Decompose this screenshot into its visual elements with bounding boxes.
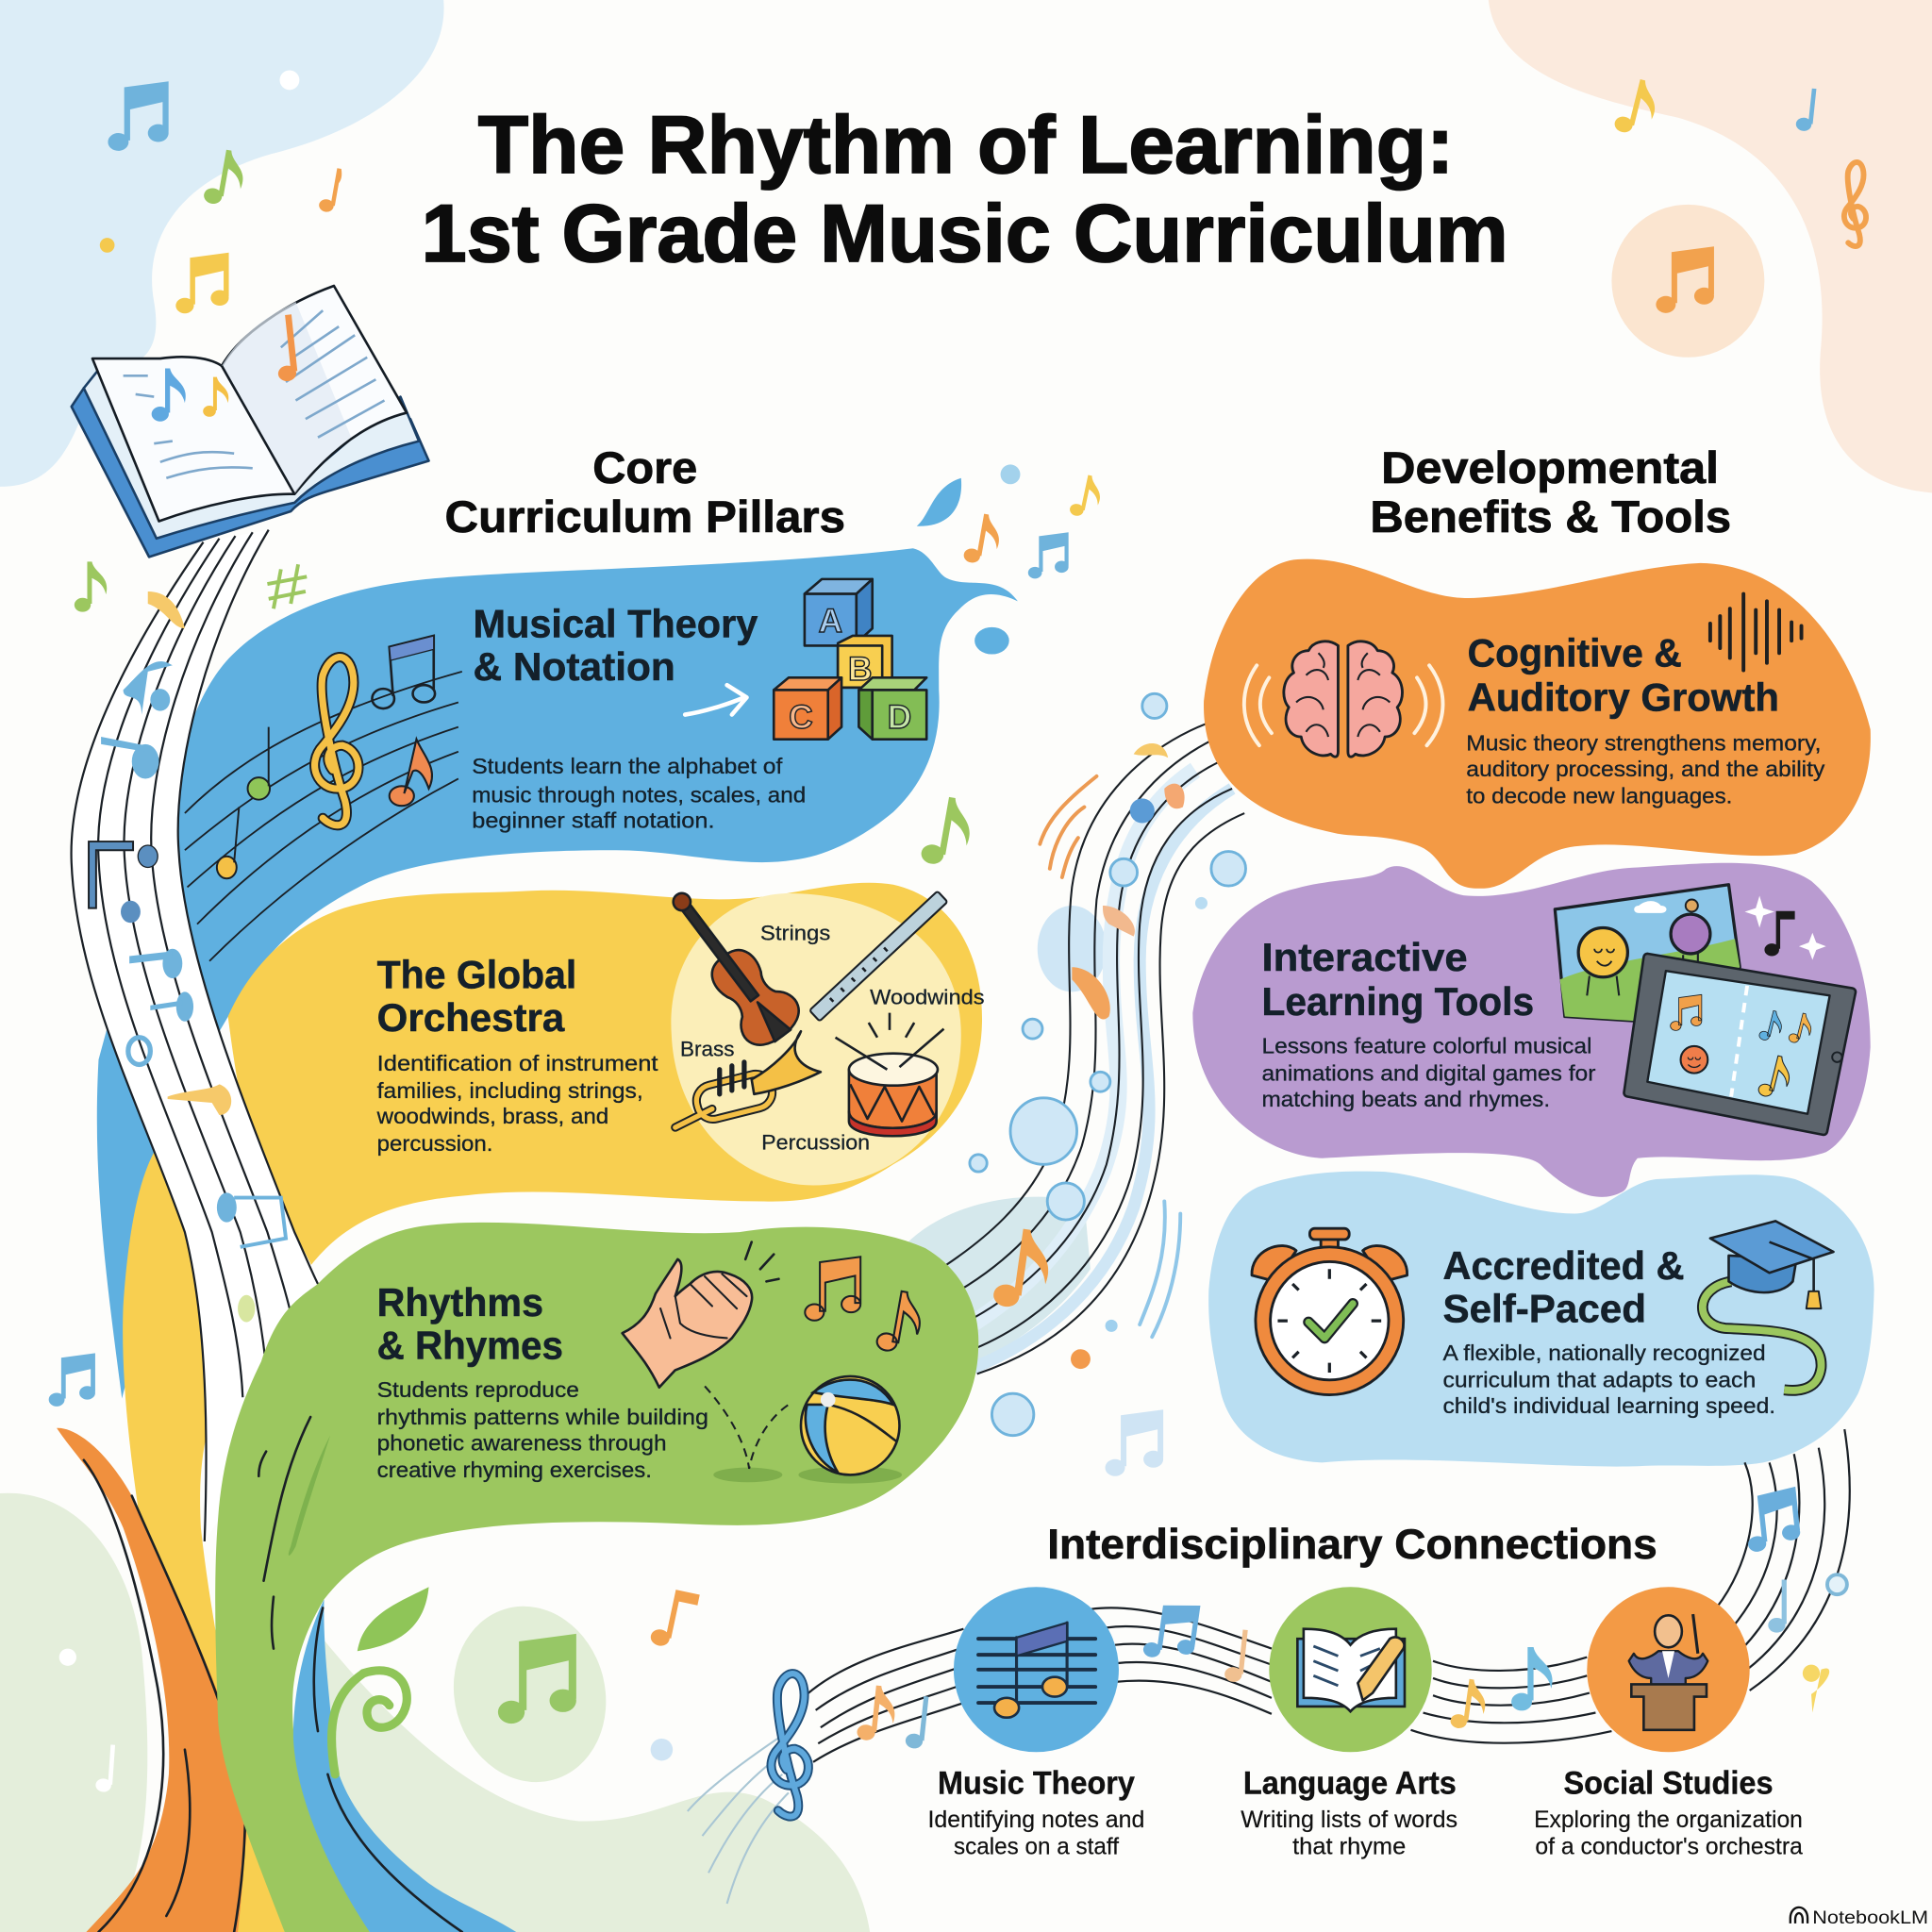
label: language arts: Language Arts [1243, 1766, 1457, 1802]
panel heading: rhythms: Rhythms [377, 1280, 543, 1324]
panel heading: global orchestra [377, 953, 576, 1040]
decorative blue motion strokes [1140, 1201, 1180, 1337]
panel heading: cognitive: Auditory Growth [1468, 675, 1779, 720]
flowing ribbon: orange tail [57, 1428, 246, 1932]
panel text: musical theory: beginner staff notation. [472, 808, 715, 833]
section heading: core curriculum [445, 442, 845, 541]
icon: flute [809, 891, 947, 1022]
panel text: interactive: Lessons feature colorful musical [1261, 1034, 1592, 1058]
panel heading: accredited: Accredited & [1442, 1243, 1684, 1288]
bounce path [705, 1386, 789, 1469]
panel heading: interactive: Interactive [1261, 935, 1468, 979]
background ellipse: green note [434, 1589, 625, 1799]
block letters: C [789, 699, 813, 736]
label: music theory: Identifying notes and [928, 1807, 1144, 1833]
panel text: rhythms: phonetic awareness through [377, 1430, 667, 1455]
flowing ribbon: blue lower tail [293, 1599, 516, 1932]
instrument labels: Woodwinds [870, 985, 985, 1008]
note: yellow on book [203, 377, 228, 417]
instrument labels [680, 922, 985, 1155]
panel heading: rhythms [377, 1280, 563, 1368]
panel text: interactive: matching beats and rhymes. [1261, 1087, 1550, 1111]
background blob: bottom centre [323, 1639, 870, 1932]
panel text: cognitive: Music theory strengthens memory, [1466, 730, 1821, 755]
instrument labels: Brass [680, 1037, 734, 1060]
label: social studies: Social Studies [1563, 1766, 1774, 1802]
icon: sound arcs [1244, 665, 1442, 745]
panel heading: interactive [1261, 935, 1534, 1024]
icon: tablet [1627, 958, 1852, 1131]
icon: clapping hands [623, 1242, 778, 1388]
panel heading: global orchestra: The Global [377, 953, 576, 997]
title: The Rhythm of Learning: [478, 100, 1454, 191]
panel text: global orchestra: percussion. [377, 1131, 492, 1156]
cream circle: instruments [671, 893, 961, 1185]
icon: drum [836, 1013, 943, 1136]
block letters: D [888, 699, 911, 736]
panel heading: accredited [1442, 1243, 1684, 1330]
panel heading: cognitive: Cognitive & [1468, 631, 1682, 675]
icon: picture card [1555, 885, 1740, 1023]
panel text: rhythms [377, 1377, 708, 1482]
panel text: global orchestra: Identification of instrument [377, 1051, 658, 1075]
panel text: rhythms: rhythmis patterns while building [377, 1405, 708, 1429]
panel text: global orchestra: woodwinds, brass, and [376, 1104, 608, 1128]
panel heading: cognitive [1468, 631, 1779, 720]
bottom staff connections [808, 1429, 1850, 1762]
panel text: musical theory: Students learn the alphabet of [472, 754, 783, 778]
background circle: top right [1611, 205, 1764, 358]
panel text: accredited: A flexible, nationally recognized [1442, 1341, 1766, 1365]
panel text: cognitive: auditory processing, and the ability [1466, 757, 1825, 781]
icon: treble clef gold [315, 658, 358, 825]
instrument labels: Percussion [761, 1131, 870, 1155]
section heading: developmental benefits [1370, 442, 1731, 541]
watermark: NotebookLM: NotebookLM [1812, 1907, 1928, 1928]
icon: beach ball [801, 1376, 899, 1474]
panel heading: rhythms: & Rhymes [377, 1324, 563, 1368]
section heading: interdisciplinary: Interdisciplinary Connections [1047, 1522, 1657, 1568]
panel heading: global orchestra: Orchestra [377, 995, 565, 1040]
faded staff tail [688, 1731, 789, 1904]
panel heading: musical theory [474, 601, 758, 689]
middle staff lines [930, 721, 1244, 1374]
panel: accredited light blue [1208, 1172, 1874, 1467]
middle staff waves backdrop [906, 770, 1232, 1368]
section heading: developmental benefits: Benefits & Tools [1370, 491, 1731, 541]
panel: cognitive orange [1204, 559, 1871, 889]
staff notes and dots [1071, 743, 1208, 1369]
panel heading: interactive: Learning Tools [1261, 979, 1534, 1024]
label: social studies: Exploring the organization [1534, 1807, 1803, 1833]
note: orange on book [272, 314, 298, 382]
icon: graduation cap with ribbon [1703, 1221, 1834, 1391]
panel text: rhythms: Students reproduce [377, 1377, 579, 1402]
panel text: cognitive: to decode new languages. [1466, 784, 1732, 808]
background blob: bottom left [0, 1493, 147, 1932]
panel text: accredited: curriculum that adapts to each [1442, 1368, 1756, 1392]
node: social studies [1587, 1587, 1750, 1752]
icon: ABCD blocks [774, 579, 926, 740]
block letters [789, 603, 911, 736]
icon: brain [1284, 641, 1402, 757]
panel text: accredited [1442, 1341, 1775, 1418]
icon: trumpet [675, 1031, 821, 1127]
note: blue on book [152, 369, 186, 422]
notes on left staff [89, 591, 286, 1322]
panel text: interactive: animations and digital games for [1261, 1060, 1596, 1085]
panel: interactive purple [1192, 863, 1871, 1197]
flowing ribbon: yellow tail [123, 1109, 321, 1932]
arrow: white [685, 685, 747, 715]
label: social studies: of a conductor's orchestra [1535, 1835, 1803, 1860]
panel text: accredited: child's individual learning speed. [1442, 1393, 1775, 1418]
label: language arts: that rhyme [1292, 1835, 1406, 1860]
panel: rhythms green with tail [215, 1223, 978, 1932]
panel text: musical theory [472, 754, 806, 833]
ground shadows [713, 1466, 902, 1484]
icon: notes on blue staff [217, 636, 435, 878]
panel text: cognitive [1466, 730, 1825, 808]
section heading: developmental benefits: Developmental [1381, 442, 1719, 492]
flowing ribbon: blue pillar panel [97, 548, 1018, 1398]
ink strokes on green tail [258, 1417, 462, 1932]
title: 1st Grade Music Curriculum [422, 189, 1508, 279]
ribbon ink strokes on orange tail [84, 1460, 245, 1932]
hash sign green [267, 564, 307, 608]
icon: stopwatch [1252, 1228, 1407, 1395]
icon: treble clef orange top right [1844, 162, 1866, 246]
icon: orange note on staff [992, 1226, 1054, 1312]
icon: small black note with sparkles [1744, 896, 1826, 959]
panel text: rhythms: creative rhyming exercises. [377, 1457, 652, 1482]
icon: leaf and spiral [331, 1587, 429, 1774]
icon: waveform [1710, 594, 1802, 671]
icon: violin [652, 876, 808, 1055]
node: music theory [954, 1587, 1119, 1752]
background blob: top left [0, 0, 444, 487]
panel text: musical theory: music through notes, scales, and [472, 782, 806, 807]
panel heading: musical theory: Musical Theory [474, 601, 758, 645]
decorative orange motion strokes [1040, 776, 1096, 877]
icon: treble clef blue [771, 1674, 808, 1817]
panel text: global orchestra [376, 1051, 658, 1156]
section heading: core curriculum: Curriculum Pillars [445, 491, 845, 541]
label: social studies [1534, 1766, 1803, 1860]
label: music theory [928, 1766, 1144, 1860]
label: music theory: Music Theory [938, 1766, 1135, 1802]
label: language arts: Writing lists of words [1241, 1807, 1457, 1833]
block letters: B [848, 651, 872, 688]
instrument labels: Strings [760, 922, 830, 945]
bubbles [970, 693, 1245, 1436]
splash drops near blue panel [917, 464, 1020, 655]
panel text: interactive [1261, 1034, 1596, 1111]
title [422, 100, 1508, 279]
panel text: global orchestra: families, including strings, [377, 1078, 643, 1103]
darker streak on green tail [289, 1436, 330, 1556]
icon: open book [72, 286, 429, 557]
panel heading: accredited: Self-Paced [1442, 1286, 1646, 1330]
label: music theory: scales on a staff [954, 1835, 1119, 1860]
panel: global orchestra yellow [228, 883, 982, 1269]
icon: orange notes on green [805, 1257, 924, 1356]
block letters: A [819, 603, 842, 640]
section heading: core curriculum: Core [592, 442, 697, 492]
label: language arts [1241, 1766, 1457, 1860]
bottom staff notes [857, 1487, 1847, 1749]
panel heading: musical theory: & Notation [474, 644, 675, 689]
background blob: top right [1489, 0, 1932, 492]
staff lines in blue panel [185, 672, 462, 961]
book staff ribbon [72, 530, 323, 1541]
node: language arts [1269, 1587, 1432, 1752]
